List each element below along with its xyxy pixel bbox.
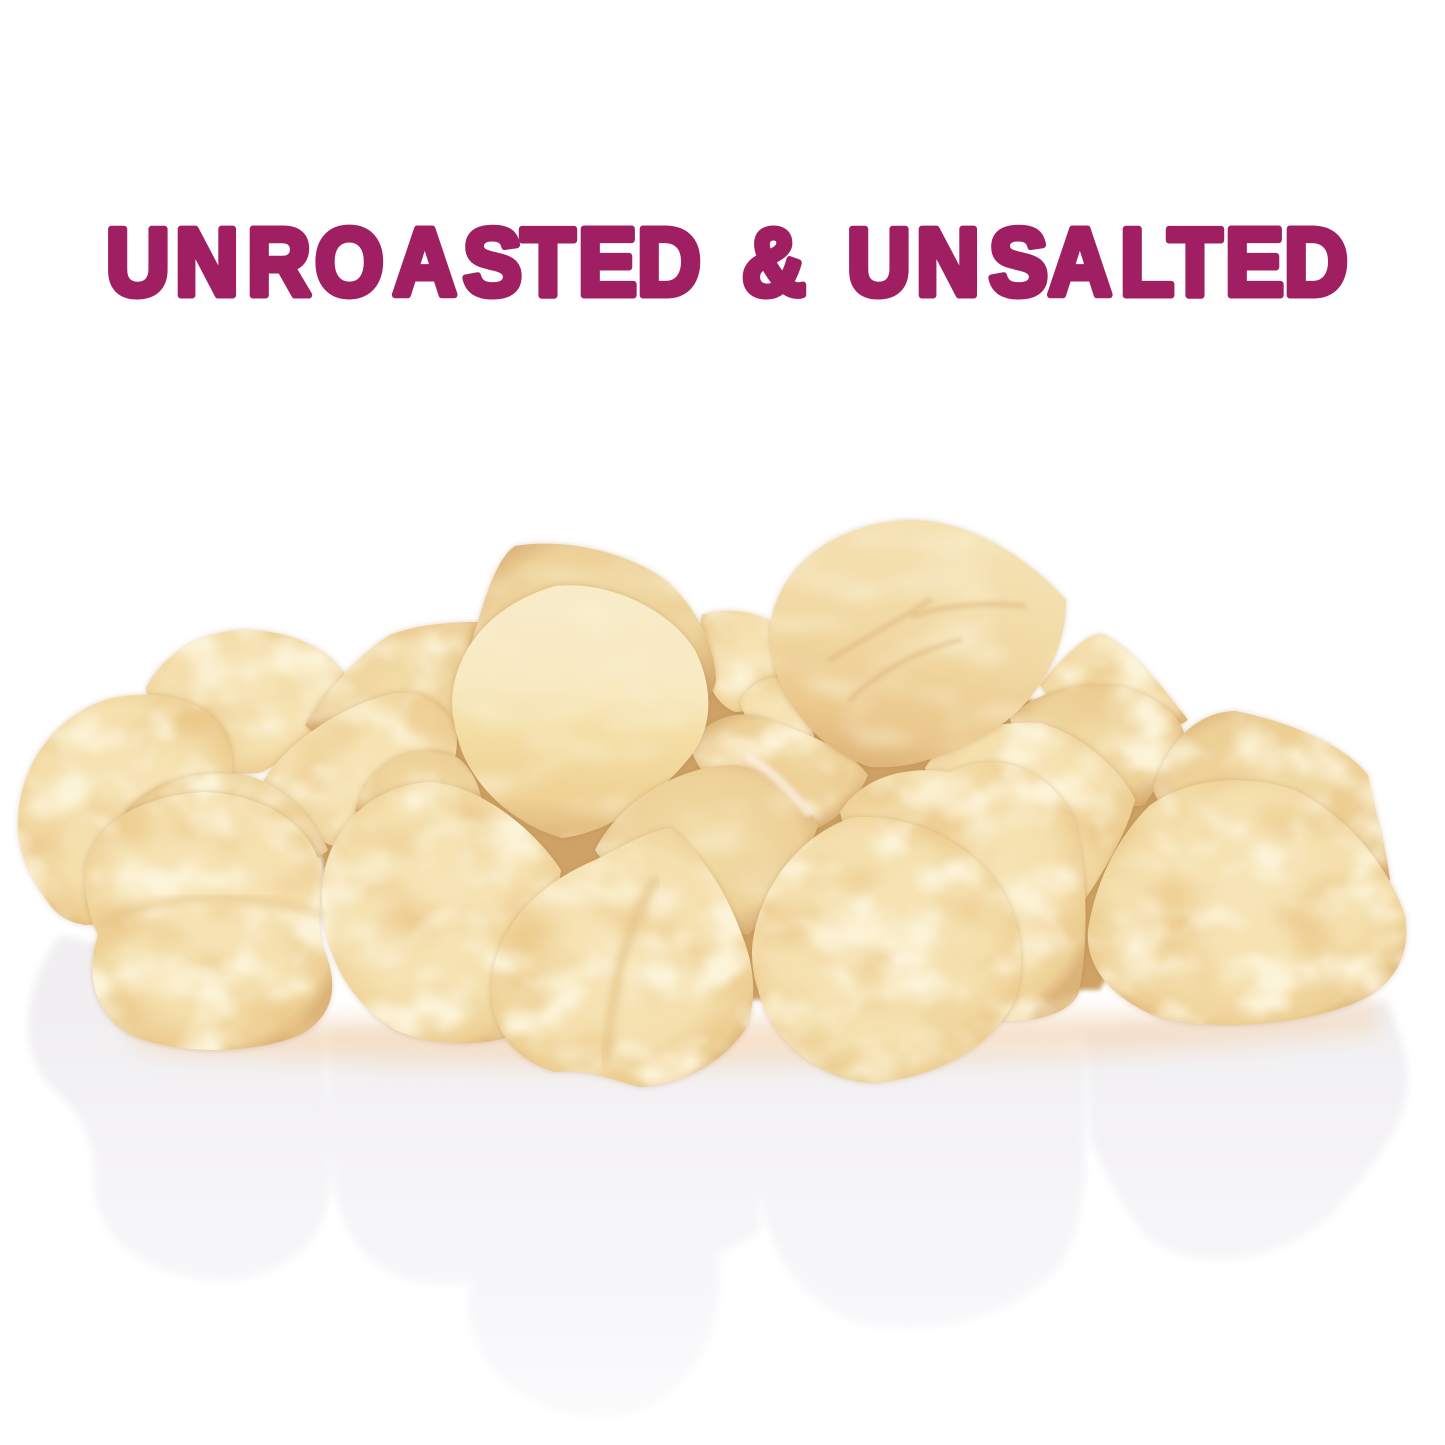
centre left small hazelnut <box>355 750 482 835</box>
back hazelnut 3 <box>700 611 784 712</box>
warm contact shadow <box>120 1005 1380 1065</box>
reflection of hazelnuts <box>28 935 1407 1416</box>
back hazelnut 2 <box>305 622 489 753</box>
middle back hazelnut <box>264 693 457 850</box>
hazelnut pile <box>18 520 1406 1087</box>
back hazelnut 4 <box>1040 634 1188 733</box>
left hazelnut <box>18 695 233 925</box>
back hazelnut 5 <box>1010 685 1185 807</box>
dark gaps behind pile <box>300 634 1200 1010</box>
centre right small hazelnut <box>690 714 868 830</box>
right middle hazelnut <box>925 723 1135 910</box>
nut details <box>100 600 1024 1062</box>
front middle hazelnut <box>322 782 561 1043</box>
front centre hazelnut <box>491 828 753 1087</box>
large top right hazelnut <box>770 520 1066 767</box>
back hazelnut 1 <box>146 630 347 774</box>
title: UNROASTED & UNSALTED <box>106 209 1348 316</box>
left behind hazelnut <box>125 773 328 869</box>
top hazelnut <box>472 544 716 722</box>
front left hazelnut <box>85 792 332 1050</box>
back hazelnut 6 <box>740 678 815 746</box>
waist of front left hazelnut <box>100 897 320 925</box>
front centre right hazelnut <box>752 817 1021 1083</box>
far right back hazelnut <box>1153 711 1390 885</box>
large centre hazelnut <box>452 585 708 838</box>
crease in front centre hazelnut <box>606 880 655 1062</box>
pale exposed patch on centre nut <box>750 758 808 812</box>
skin streaks on large hazelnut <box>830 600 1024 700</box>
right centre hazelnut <box>840 762 1086 1021</box>
front right hazelnut <box>1088 780 1406 1025</box>
centre back hazelnut <box>595 765 818 935</box>
